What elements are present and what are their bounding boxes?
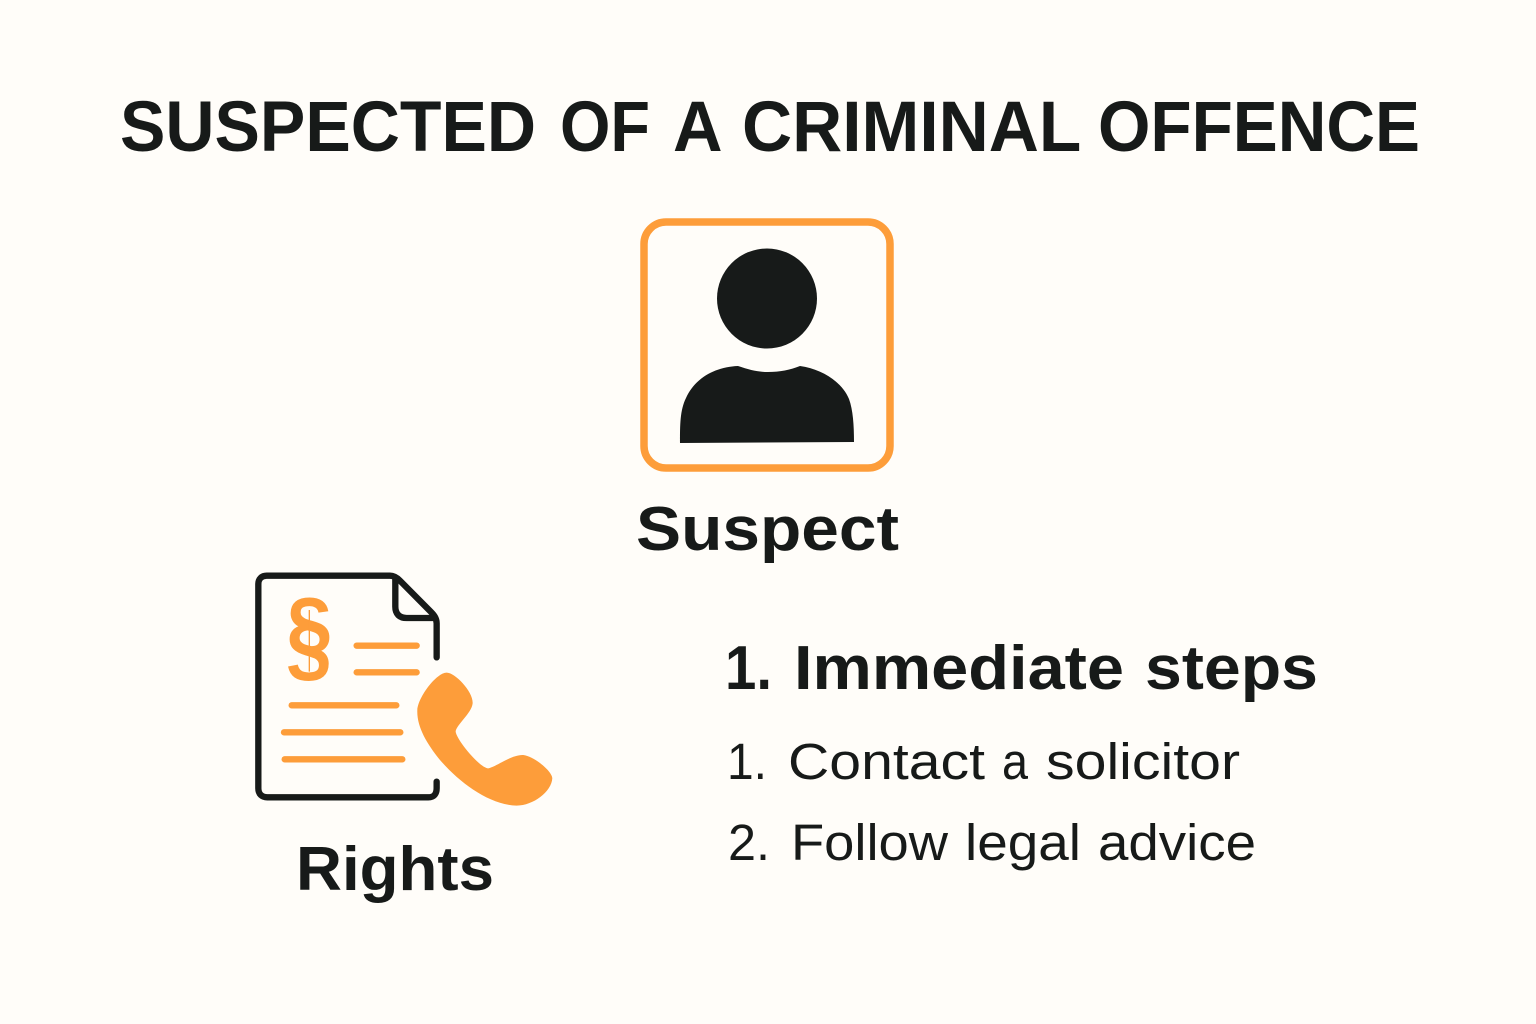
document outline [258, 576, 437, 797]
icon: rights document and phone [258, 576, 552, 806]
step 1: 1. [727, 733, 767, 790]
rights label: Rights [296, 835, 494, 904]
person shoulders [680, 366, 854, 443]
title: A [673, 88, 721, 167]
step 1: Contact [788, 733, 985, 790]
title: OFFENCE [1098, 88, 1420, 167]
title: SUSPECTED [120, 88, 536, 167]
steps heading: 1. [725, 634, 772, 703]
step 2: Follow [791, 814, 948, 871]
step 1: solicitor [1046, 733, 1240, 790]
phone handset [417, 673, 552, 806]
steps heading: Immediate [794, 634, 1124, 703]
icon: suspect [644, 222, 890, 468]
step 2: advice [1098, 814, 1256, 871]
step 1: a [1002, 733, 1029, 790]
person head [717, 248, 817, 348]
section sign stroke [307, 610, 311, 672]
steps heading: steps [1145, 634, 1318, 703]
suspect label: Suspect [636, 495, 899, 564]
section sign: § [286, 576, 333, 691]
text lines [284, 646, 417, 759]
step 2: 2. [728, 814, 770, 871]
title: CRIMINAL [742, 88, 1080, 167]
title: OF [560, 88, 650, 167]
step 2: legal [965, 814, 1081, 871]
icon frame [644, 222, 890, 468]
document fold [395, 578, 435, 618]
